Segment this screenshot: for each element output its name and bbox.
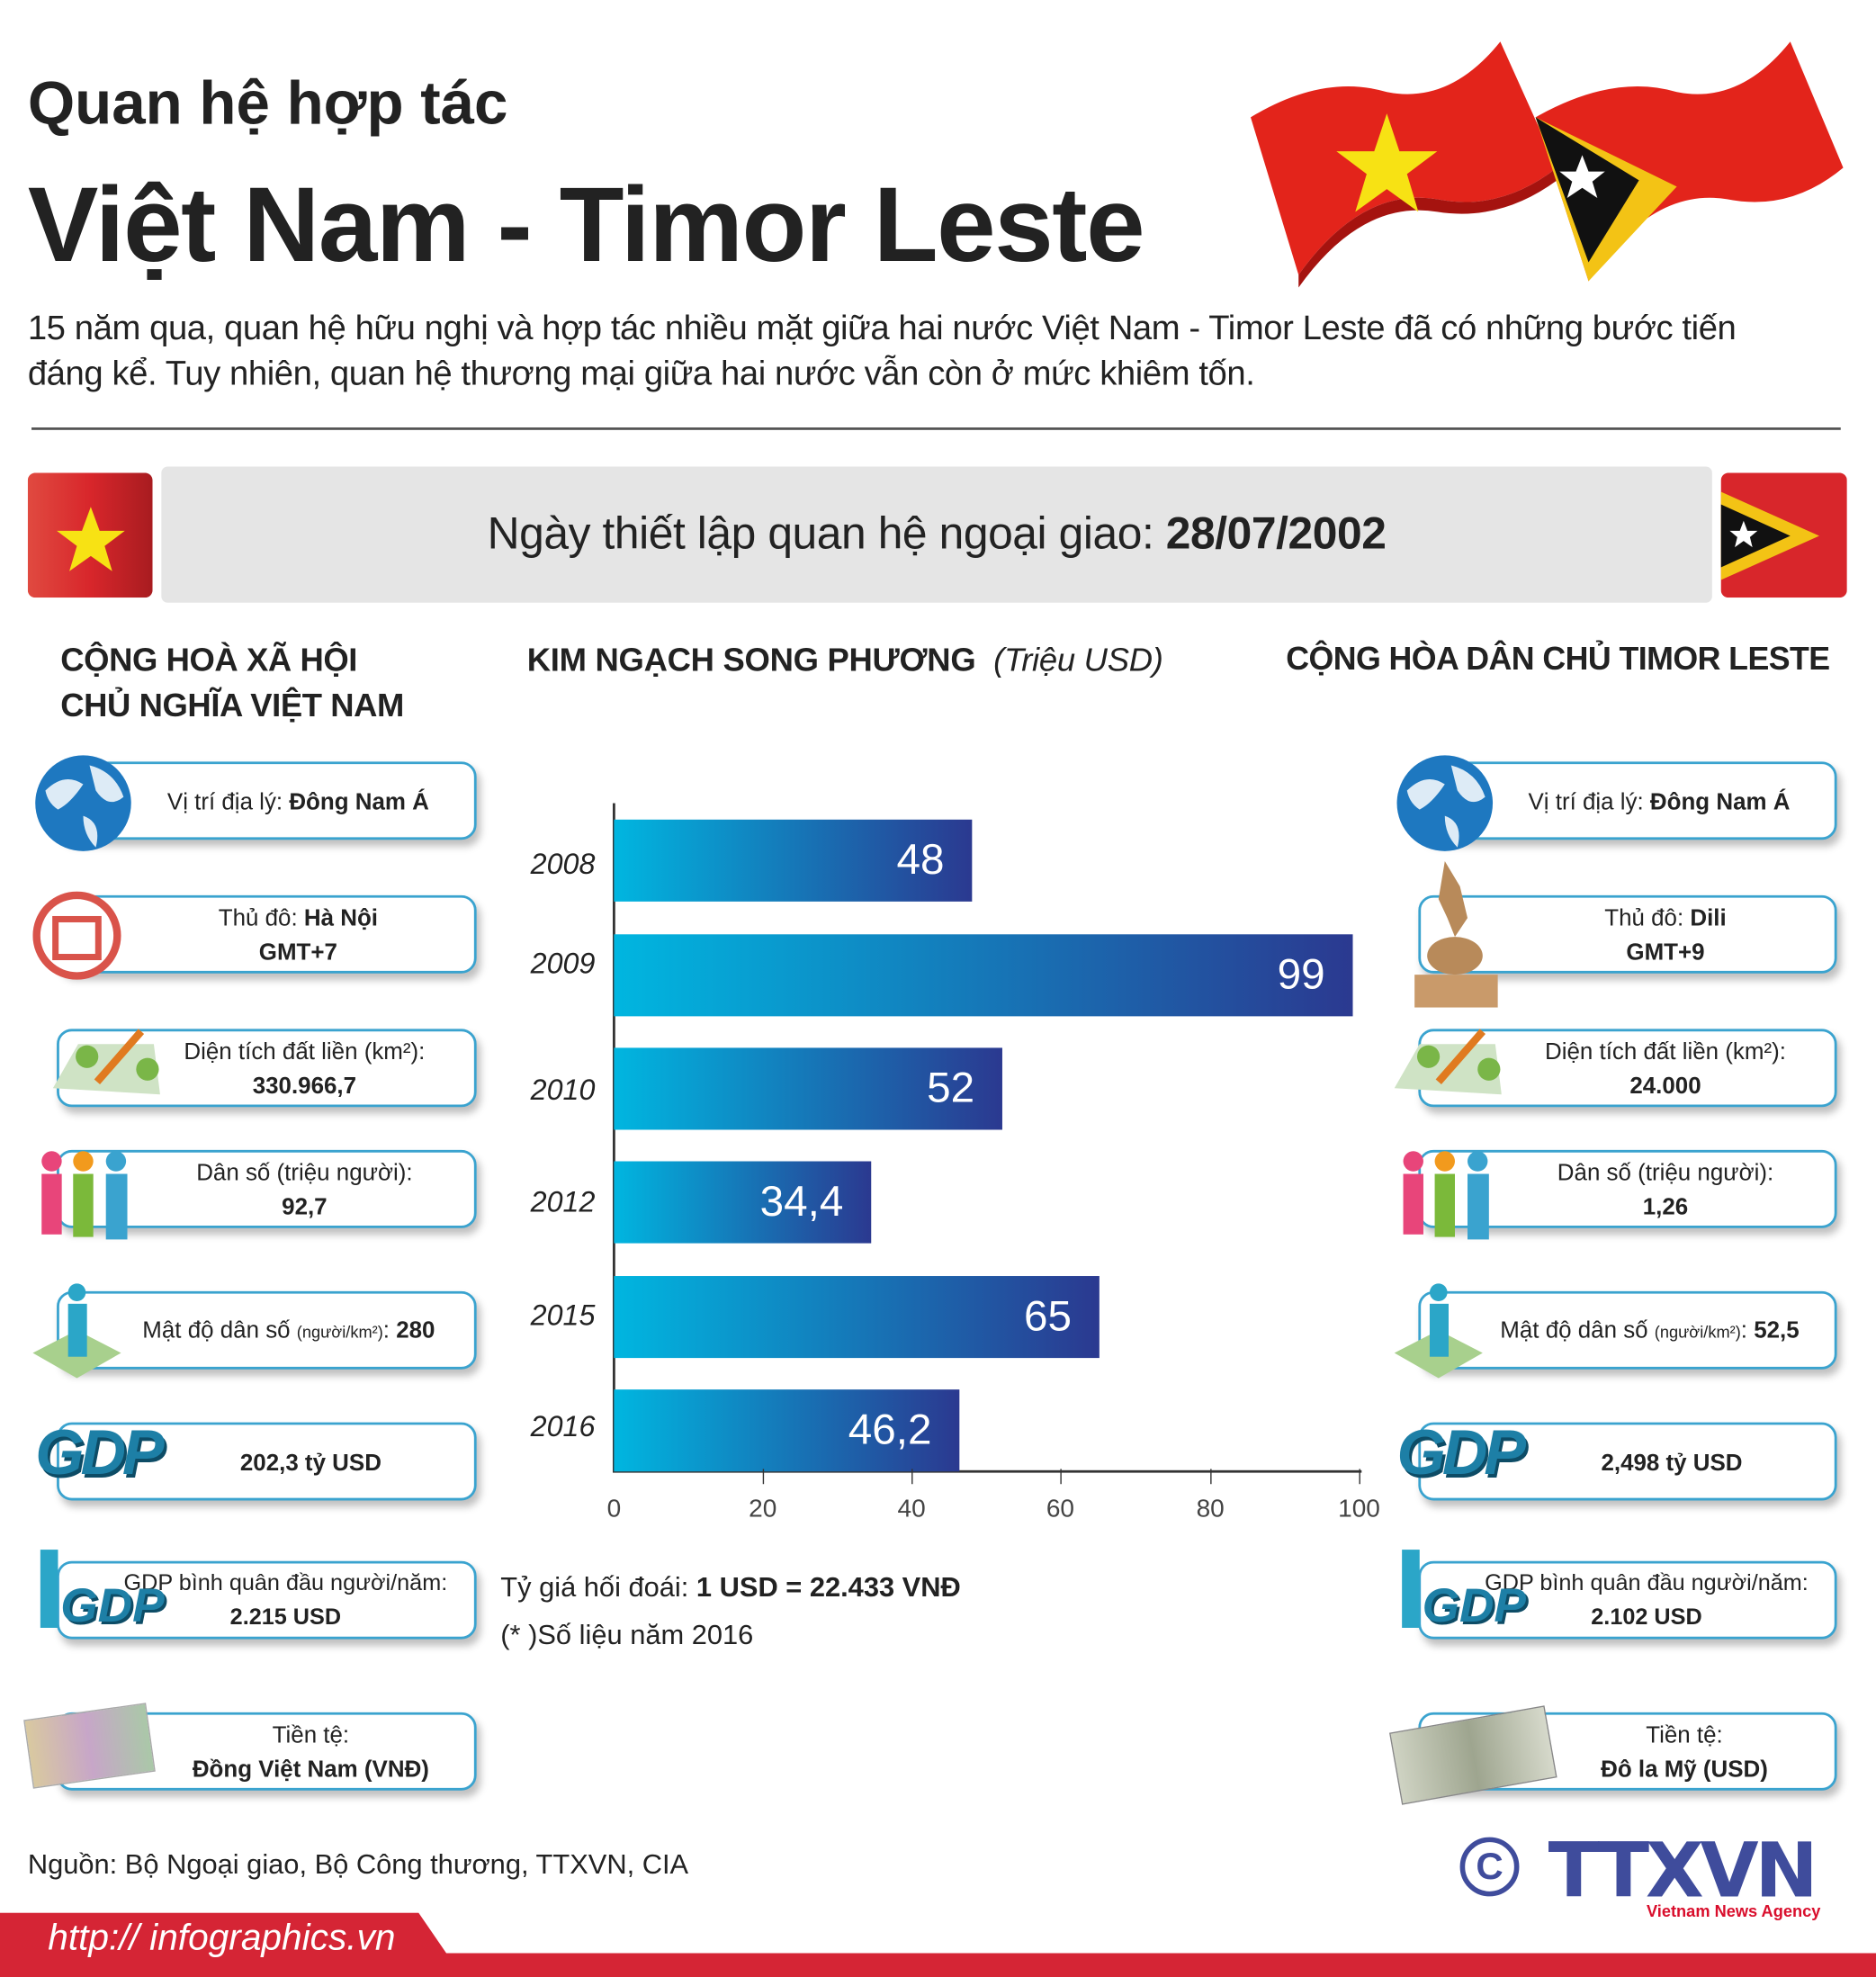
box: GDP per capita TL: GDP bình quân đầu người/năm: xyxy=(1485,1570,1809,1595)
box: GDP per capita TL xyxy=(1418,1561,1837,1640)
heading: chart: KIM NGẠCH SONG PHƯƠNG (Triệu USD) xyxy=(527,641,1163,678)
icon: GDP per capita: GDP xyxy=(1423,1580,1526,1633)
icon: GDP per capita: GDP xyxy=(60,1580,165,1633)
icon: globe xyxy=(35,755,131,851)
box: GDP TL: 2,498 tỷ USD xyxy=(1601,1448,1743,1475)
bar 2016: 46,2 xyxy=(848,1406,931,1454)
box: density VN xyxy=(57,1291,477,1370)
bar 2009 xyxy=(614,934,1352,1016)
icon: globe xyxy=(1396,755,1494,851)
icon: density person xyxy=(1395,1283,1483,1379)
box: area VN xyxy=(57,1029,477,1107)
bar 2008: 48 xyxy=(897,836,945,884)
box: currency TL xyxy=(1418,1712,1837,1791)
intro paragraph: đáng kể. Tuy nhiên, quan hệ thương mại giữa hai nước vẫn còn ở mức khiêm tốn. xyxy=(28,353,1254,392)
bar 2012 xyxy=(614,1162,871,1244)
logo: TTXVN: C xyxy=(1476,1846,1503,1888)
bar 2008 xyxy=(614,820,972,902)
text: 0 xyxy=(607,1496,621,1523)
box: area TL: 24.000 xyxy=(1629,1072,1701,1098)
banner: diplomatic date xyxy=(161,466,1712,603)
text: 100 xyxy=(1338,1496,1380,1523)
heading: Timor Leste: CỘNG HÒA DÂN CHỦ TIMOR LESTE xyxy=(1286,642,1830,677)
logo: TTXVN: TTXVN xyxy=(1548,1827,1815,1915)
box: GDP per capita VN xyxy=(57,1561,477,1640)
box: location TL: Vị trí địa lý: Đông Nam Á xyxy=(1529,787,1790,813)
title line 1: Quan hệ hợp tác xyxy=(28,70,507,138)
flags illustration xyxy=(1251,41,1843,288)
bar 2015: 65 xyxy=(1024,1292,1072,1340)
box: capital TL xyxy=(1418,895,1837,974)
icon: GDP per capita xyxy=(40,1550,167,1633)
box: density VN: Mật độ dân số (người/km²): 280 xyxy=(142,1316,435,1343)
box: population TL: Dân số (triệu người): xyxy=(1557,1159,1773,1185)
box: population VN xyxy=(57,1150,477,1228)
banner: diplomatic date: Ngày thiết lập quan hệ ngoại giao: 28/07/2002 xyxy=(488,508,1387,559)
box: currency VN: Tiền tệ: xyxy=(273,1721,349,1748)
icon: statue xyxy=(1414,861,1498,1008)
box: area TL: Diện tích đất liền (km²): xyxy=(1545,1038,1786,1065)
box: GDP per capita VN: 2.215 USD xyxy=(230,1604,341,1629)
text: 2016 xyxy=(531,1410,595,1442)
text: 2015 xyxy=(531,1299,595,1332)
box: population TL: 1,26 xyxy=(1643,1193,1688,1219)
box: area VN: Diện tích đất liền (km²): xyxy=(184,1038,425,1065)
box: population VN: 92,7 xyxy=(282,1193,328,1219)
icon: USD note xyxy=(1389,1705,1557,1805)
icon: Vietnam flag xyxy=(27,473,153,598)
icon: people xyxy=(41,1151,128,1240)
box: currency TL: Tiền tệ: xyxy=(1646,1721,1723,1748)
intro paragraph: 15 năm qua, quan hệ hữu nghị và hợp tác nhiều mặt giữa hai nước Việt Nam - Timor Leste đã có những bước tiến xyxy=(28,308,1736,346)
icon: VND note xyxy=(23,1703,156,1789)
icon: people xyxy=(1404,1151,1489,1240)
box: currency VN: Đồng Việt Nam (VNĐ) xyxy=(193,1755,429,1782)
source: Nguồn: Bộ Ngoại giao, Bộ Công thương, TTXVN, CIA xyxy=(28,1848,688,1880)
icon: Timor Leste flag xyxy=(1720,473,1847,598)
text: 2008 xyxy=(531,848,595,880)
text: 2010 xyxy=(531,1073,595,1106)
heading: Vietnam xyxy=(60,641,404,723)
title line 2: Việt Nam - Timor Leste xyxy=(28,166,1144,283)
intro paragraph xyxy=(28,308,1736,392)
box: GDP VN xyxy=(57,1423,477,1500)
icon: GDP: GDP xyxy=(35,1417,160,1487)
text: 2009 xyxy=(531,947,595,980)
box: population TL xyxy=(1418,1150,1837,1228)
exchange rate note: (* )Số liệu năm 2016 xyxy=(500,1619,753,1650)
icon: density person xyxy=(32,1283,121,1379)
icon: map xyxy=(1395,1029,1502,1094)
box: area TL xyxy=(1418,1029,1837,1107)
icon: GDP per capita xyxy=(1402,1550,1529,1633)
box: GDP TL xyxy=(1418,1423,1837,1500)
text: 80 xyxy=(1197,1496,1225,1523)
panel: Timor Leste facts xyxy=(1389,755,1845,1805)
box: capital TL: Thủ đô: Dili xyxy=(1604,904,1727,930)
bar 2010: 52 xyxy=(927,1065,974,1112)
box: capital VN: GMT+7 xyxy=(259,939,337,965)
heading: Vietnam: CHỦ NGHĨA VIỆT NAM xyxy=(60,686,404,723)
panel: Vietnam facts xyxy=(23,755,484,1802)
icon: GDP: GDP xyxy=(1397,1417,1522,1487)
box: capital VN xyxy=(57,895,477,974)
heading: Vietnam: CỘNG HOÀ XÃ HỘI xyxy=(60,641,357,678)
box: density TL: Mật độ dân số (người/km²): 52,5 xyxy=(1500,1316,1800,1343)
text: 60 xyxy=(1046,1496,1074,1523)
icon: Hanoi emblem xyxy=(32,891,121,980)
bar 2012: 34,4 xyxy=(760,1178,843,1226)
bar 2010 xyxy=(614,1047,1002,1129)
box: currency TL: Đô la Mỹ (USD) xyxy=(1601,1755,1768,1782)
exchange rate note xyxy=(500,1571,961,1650)
box: capital TL: GMT+9 xyxy=(1626,939,1705,965)
footer url: http:// infographics.vn xyxy=(48,1918,395,1958)
exchange rate note: Tỷ giá hối đoái: 1 USD = 22.433 VNĐ xyxy=(500,1571,961,1603)
bar 2009: 99 xyxy=(1278,951,1325,999)
box: location VN xyxy=(57,761,477,840)
box: location TL xyxy=(1418,761,1837,840)
box: currency VN xyxy=(57,1712,477,1791)
box: density TL xyxy=(1418,1291,1837,1370)
box: GDP VN: 202,3 tỷ USD xyxy=(240,1448,381,1475)
text: 2012 xyxy=(531,1185,595,1218)
text: 20 xyxy=(749,1496,776,1523)
text: 40 xyxy=(897,1496,926,1523)
chart: bilateral trade xyxy=(612,803,1362,1473)
footer bar xyxy=(0,1913,1876,1977)
box: capital VN: Thủ đô: Hà Nội xyxy=(219,904,378,930)
box: location VN: Vị trí địa lý: Đông Nam Á xyxy=(167,787,429,813)
logo: TTXVN xyxy=(1459,1827,1821,1920)
bar 2016 xyxy=(614,1389,959,1471)
icon: map xyxy=(53,1029,160,1094)
box: population VN: Dân số (triệu người): xyxy=(196,1159,413,1185)
bar 2015 xyxy=(614,1276,1100,1358)
box: area VN: 330.966,7 xyxy=(253,1072,356,1098)
box: GDP per capita VN: GDP bình quân đầu người/năm: xyxy=(124,1570,447,1595)
box: GDP per capita TL: 2.102 USD xyxy=(1591,1604,1702,1629)
logo: TTXVN: Vietnam News Agency xyxy=(1647,1901,1820,1920)
